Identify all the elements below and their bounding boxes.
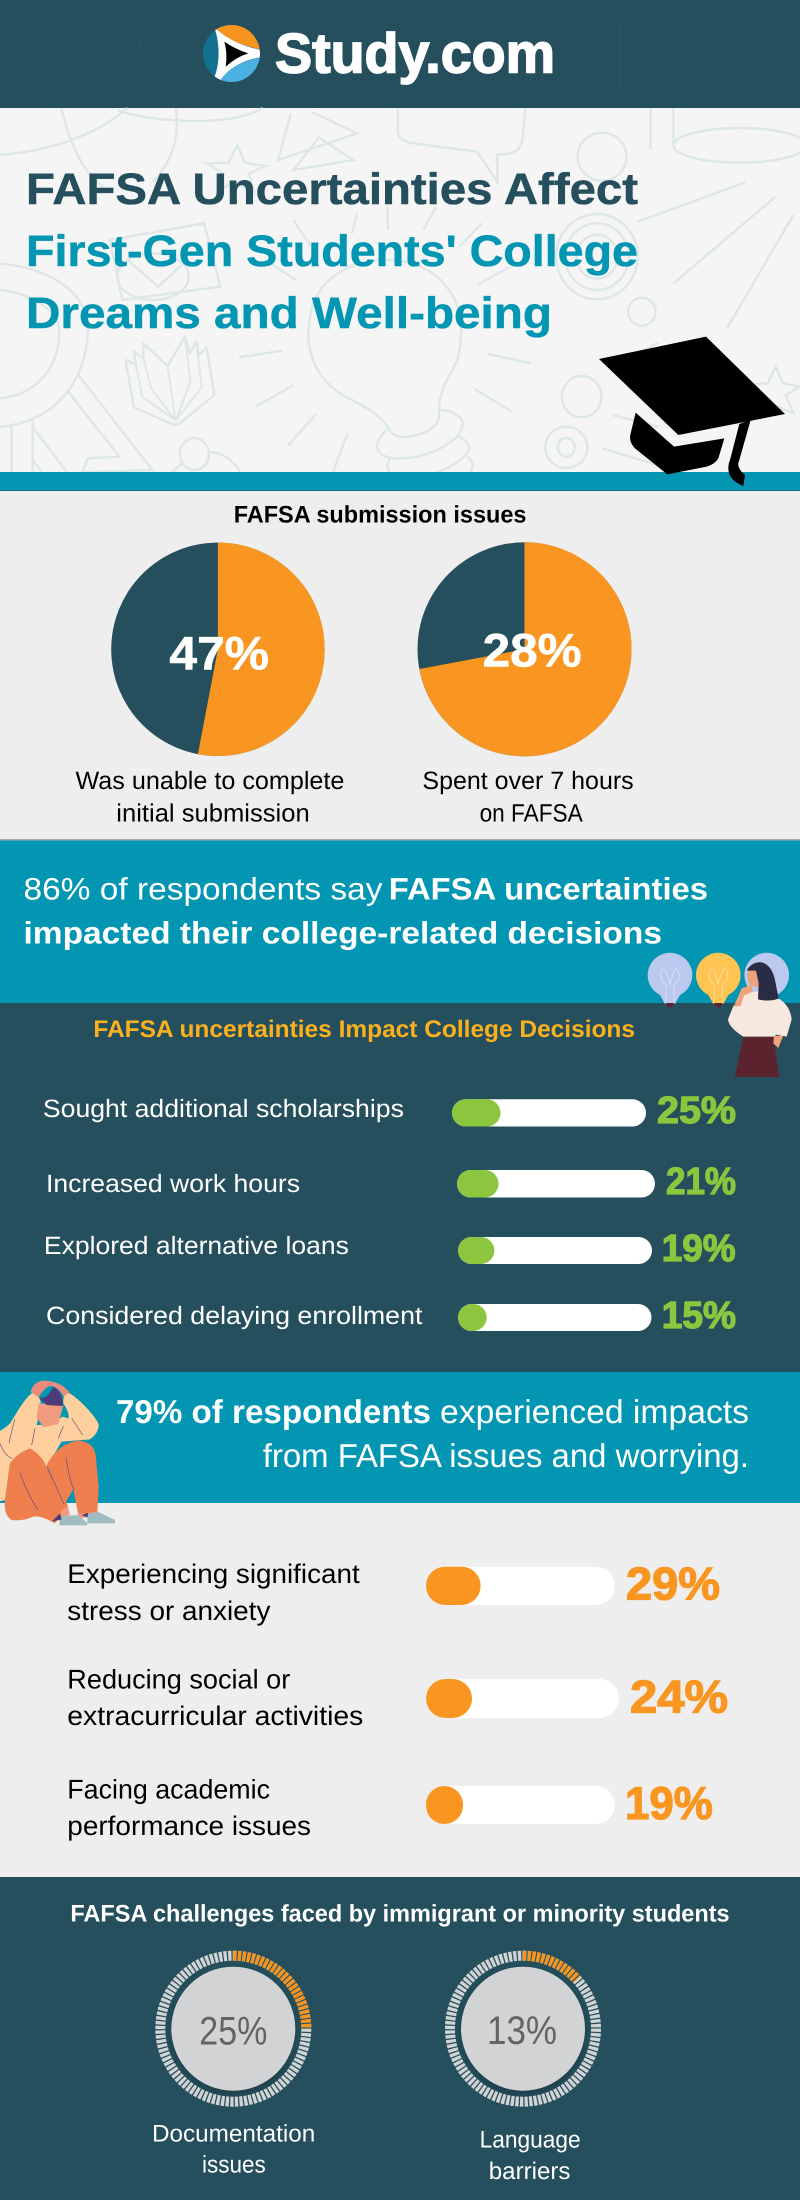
heading: FAFSA uncertainties Impact College Decisions — [93, 1016, 635, 1043]
progress ring: 25% — [160, 1956, 306, 2102]
ring label: documentation issues: Documentation — [152, 2121, 315, 2148]
row: academic 19% — [67, 1774, 713, 1841]
pie chart: 28% — [418, 542, 632, 756]
panel: 79% callout — [0, 1372, 800, 1503]
logo wordmark: Study.com — [275, 22, 555, 84]
row: delaying enrollment 15% — [46, 1295, 736, 1337]
pie label: over 7 hours: on FAFSA — [480, 800, 583, 828]
panel: 86% callout: FAFSA uncertainties — [389, 871, 708, 906]
panel: college decisions — [0, 1003, 800, 1372]
row: stress 29%: Experiencing significant — [67, 1559, 360, 1589]
row: scholarships 25%: 25% — [657, 1090, 736, 1132]
icon: blue bulb — [648, 953, 692, 1008]
progress ring: 13% — [450, 1956, 596, 2102]
pie label: over 7 hours: Spent over 7 hours — [422, 767, 634, 795]
illustration: light bulbs and thinking woman — [648, 953, 792, 1077]
panel: 79% callout: from FAFSA issues and worrying. — [263, 1437, 749, 1474]
icon: graduation cap — [599, 337, 785, 486]
row: social 24%: extracurricular activities — [67, 1701, 363, 1731]
row: work hours 21%: 21% — [666, 1161, 736, 1203]
row: scholarships 25% — [43, 1090, 736, 1132]
row: social 24%: 24% — [630, 1671, 728, 1723]
row: academic 19%: 19% — [625, 1777, 713, 1829]
ring label: language barriers: Language — [480, 2126, 581, 2153]
row: scholarships 25%: Sought additional scholarships — [43, 1095, 404, 1123]
illustration: stressed student — [0, 1381, 115, 1525]
ring label: language barriers — [480, 2126, 581, 2185]
ring label: language barriers: barriers — [489, 2158, 570, 2185]
ring label: documentation issues — [152, 2121, 315, 2179]
row: delaying enrollment 15%: Considered delaying enrollment — [46, 1302, 422, 1330]
panel: hero title — [0, 108, 800, 472]
title: First-Gen Students' College — [26, 227, 638, 276]
pie chart: 28%: 28% — [483, 624, 582, 677]
title: Dreams and Well-being — [26, 289, 552, 338]
row: stress 29% — [67, 1557, 720, 1626]
panel: 79% callout: experienced impacts — [440, 1393, 749, 1430]
pie label: unable to complete — [76, 767, 344, 828]
title: FAFSA Uncertainties Affect — [26, 165, 638, 214]
row: work hours 21%: Increased work hours — [46, 1170, 300, 1198]
progress ring: 13%: 13% — [487, 2009, 557, 2053]
ring label: documentation issues: issues — [202, 2152, 266, 2179]
row: academic 19%: performance issues — [67, 1811, 311, 1841]
heading: FAFSA submission issues — [234, 502, 526, 529]
pie label: unable to complete: Was unable to complete — [76, 767, 344, 795]
panel: 86% callout — [0, 840, 800, 1003]
pie chart: 47%: 47% — [169, 626, 269, 679]
icon: Study.com logo — [203, 25, 260, 82]
panel: 79% callout: 79% of respondents — [116, 1393, 431, 1430]
panel: immigrant or minority challenges — [0, 1877, 800, 2200]
panel: well-being impacts — [0, 1503, 800, 1877]
row: delaying enrollment 15%: 15% — [662, 1295, 736, 1337]
row: loans 19% — [44, 1228, 736, 1270]
progress ring: 25%: 25% — [199, 2009, 267, 2053]
row: loans 19%: 19% — [662, 1228, 736, 1270]
row: academic 19%: Facing academic — [67, 1774, 270, 1804]
icon: blue bulb behind woman — [744, 953, 789, 1004]
panel: 86% callout: 86% of respondents say — [24, 871, 383, 906]
panel: FAFSA submission issues — [0, 491, 800, 840]
pie label: unable to complete: initial submission — [116, 800, 310, 828]
heading: FAFSA challenges faced by immigrant or minority students — [70, 1901, 730, 1928]
title — [26, 165, 638, 338]
row: loans 19%: Explored alternative loans — [44, 1232, 349, 1260]
row: stress 29%: 29% — [626, 1557, 720, 1609]
row: social 24%: Reducing social or — [67, 1664, 290, 1694]
row: work hours 21% — [46, 1161, 736, 1203]
icon: woman — [728, 962, 792, 1077]
pie chart: 47% — [111, 543, 325, 756]
row: social 24% — [67, 1664, 728, 1731]
row: stress 29%: stress or anxiety — [67, 1596, 271, 1626]
panel: header — [0, 0, 800, 108]
panel: 86% callout: impacted their college-related decisions — [24, 915, 662, 950]
icon: yellow bulb — [696, 953, 741, 1008]
pie label: over 7 hours — [422, 767, 634, 828]
divider bar: teal — [0, 472, 800, 491]
